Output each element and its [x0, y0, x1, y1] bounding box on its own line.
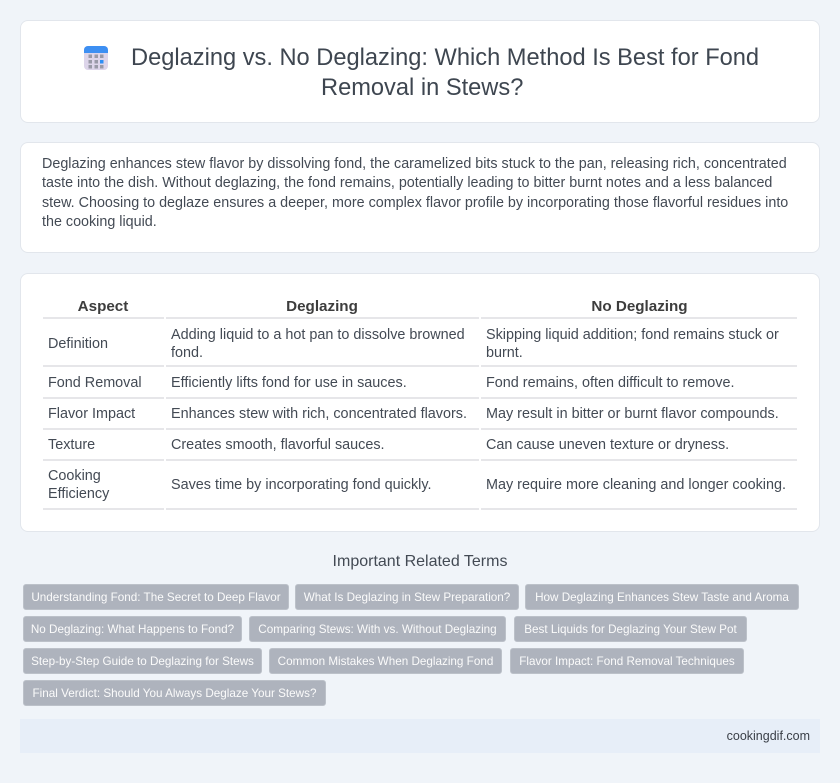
row: cooking efficiency: Efficiency — [48, 486, 109, 502]
row: texture: Texture — [48, 437, 95, 453]
row: definition: Definition — [48, 336, 108, 352]
related terms tags: Comparing Stews: With vs. Without Deglazing — [258, 623, 497, 636]
related terms tags — [23, 584, 799, 706]
panel: intro text — [20, 142, 820, 253]
row: cooking efficiency: Saves time by incorporating fond quickly. — [171, 477, 432, 493]
row: definition: burnt. — [486, 345, 523, 361]
related terms tags: No Deglazing: What Happens to Fond? — [31, 623, 234, 636]
row: cooking efficiency: Cooking — [48, 468, 101, 484]
related terms tags: Best Liquids for Deglazing Your Stew Pot — [524, 623, 737, 636]
related terms tags: Final Verdict: Should You Always Deglaze Your Stews? — [33, 687, 316, 700]
row: texture — [48, 437, 729, 453]
related terms tags: Flavor Impact: Fond Removal Techniques — [519, 655, 735, 668]
row: flavor impact — [48, 406, 779, 422]
row: flavor impact: Flavor Impact — [48, 406, 135, 422]
title: Deglazing vs. No Deglazing: Which Method Is Best for Fond — [131, 45, 759, 71]
table header row: Aspect — [78, 298, 128, 315]
row: texture: Creates smooth, flavorful sauces. — [171, 437, 385, 453]
row: texture: Can cause uneven texture or dryness. — [486, 437, 729, 453]
related terms tags: What Is Deglazing in Stew Preparation? — [304, 591, 510, 604]
row: fond removal: Efficiently lifts fond for use in sauces. — [171, 375, 407, 391]
related terms tags: Step-by-Step Guide to Deglazing for Stews — [31, 655, 254, 668]
table header row — [78, 298, 688, 315]
row: flavor impact: May result in bitter or burnt flavor compounds. — [486, 406, 779, 422]
related terms tags: Common Mistakes When Deglazing Fond — [278, 655, 493, 668]
icon: calendar — [84, 46, 108, 70]
table header row: Deglazing — [286, 298, 358, 315]
footer site name: cookingdif.com — [727, 729, 810, 743]
text block: intro paragraph: the cooking liquid. — [42, 214, 157, 230]
footer bar — [20, 719, 820, 753]
row: flavor impact: Enhances stew with rich, concentrated flavors. — [171, 406, 467, 422]
title — [131, 45, 759, 101]
text block: intro paragraph: taste into the dish. Without deglazing, the fond remains, potentially leading to bitter burnt notes and a less balanced — [42, 175, 772, 191]
row: definition: Skipping liquid addition; fond remains stuck or — [486, 327, 779, 343]
row: definition: fond. — [171, 345, 203, 361]
row: fond removal: Fond Removal — [48, 375, 142, 391]
related terms tags: How Deglazing Enhances Stew Taste and Aroma — [535, 591, 789, 604]
heading: important related terms: Important Related Terms — [333, 553, 507, 570]
row: definition — [48, 327, 779, 361]
row: fond removal — [48, 375, 734, 391]
table header row: No Deglazing — [591, 298, 688, 315]
title: Removal in Stews? — [321, 75, 523, 101]
row: cooking efficiency: May require more cleaning and longer cooking. — [486, 477, 786, 493]
text block: intro paragraph: Deglazing enhances stew flavor by dissolving fond, the caramelized bits stuck to the pan, releasing rich, concentrated — [42, 156, 787, 172]
row: fond removal: Fond remains, often difficult to remove. — [486, 375, 734, 391]
text block: intro paragraph — [42, 156, 788, 230]
panel: title header — [20, 20, 820, 123]
text block: intro paragraph: stew. Choosing to deglaze ensures a deeper, more complex flavor profile by incorporating those flavorful residues into — [42, 195, 788, 211]
panel: comparison table — [20, 273, 820, 532]
related terms tags: Understanding Fond: The Secret to Deep Flavor — [31, 591, 281, 604]
row: definition: Adding liquid to a hot pan to dissolve browned — [171, 327, 465, 343]
row: cooking efficiency — [48, 468, 786, 502]
